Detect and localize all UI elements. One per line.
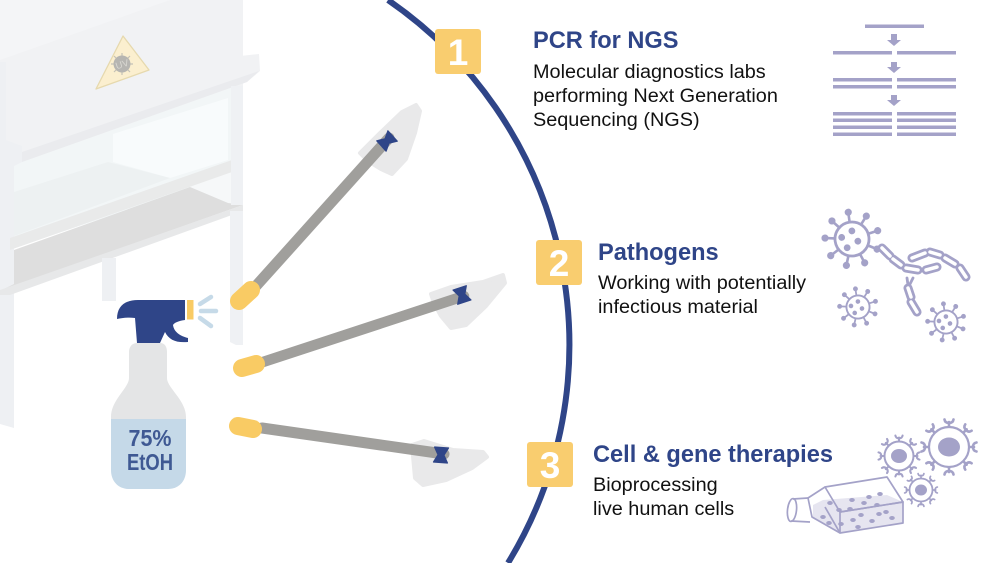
- swab 1: [239, 105, 420, 301]
- wipe 1: [360, 105, 420, 174]
- biosafety cabinet: [0, 0, 260, 428]
- wipe 3: [412, 441, 487, 485]
- cabinet lip: [6, 54, 260, 162]
- bacteria chains: [882, 248, 966, 312]
- swab 1 handle tip: [239, 290, 251, 301]
- bottle label: 75%: [128, 425, 172, 451]
- badge 2: 2: [549, 243, 569, 284]
- spray lines: [200, 297, 216, 326]
- blue arc: [388, 0, 569, 563]
- cabinet left column: [0, 62, 22, 428]
- bottle liquid: [111, 419, 186, 489]
- text: PCR description: Sequencing (NGS): [533, 109, 700, 131]
- cabinet shelf: [0, 187, 243, 291]
- bottle trigger head: [117, 300, 188, 343]
- bottle label: EtOH: [127, 449, 173, 475]
- cell medium: [878, 436, 920, 476]
- UV warning triangle: UV: [114, 57, 131, 72]
- icon: pathogens: [817, 204, 970, 345]
- swab 2: [242, 275, 505, 368]
- badge 1: 1: [448, 32, 468, 73]
- icon: cells and flask: [786, 420, 976, 533]
- icon: PCR amplification: [833, 24, 956, 136]
- cell large: [922, 420, 976, 474]
- cabinet glass: [14, 82, 232, 248]
- spray bottle: [111, 297, 216, 489]
- virus small right: [922, 298, 970, 345]
- UV warning triangle: [96, 36, 149, 89]
- text: pathogens description: infectious material: [598, 296, 758, 318]
- text: cell therapies description: Bioprocessing: [593, 474, 718, 496]
- heading: PCR for NGS: PCR for NGS: [533, 28, 679, 54]
- virus large: [817, 204, 887, 273]
- heading: Cell and gene therapies: Cell & gene therapies: [593, 442, 833, 468]
- bottle nozzle: [187, 300, 194, 320]
- bottle label: [127, 425, 173, 475]
- cell small: [905, 474, 937, 506]
- text: pathogens description: Working with potentially: [598, 272, 806, 294]
- culture flask: [786, 477, 903, 533]
- cabinet sash bar: [10, 160, 232, 250]
- swab 2 handle tip: [242, 364, 256, 368]
- badge 1: [435, 29, 481, 74]
- wipe 2: [431, 275, 505, 328]
- text: PCR description: Molecular diagnostics labs: [533, 61, 766, 83]
- virus small left: [834, 283, 882, 330]
- cabinet body: [0, 0, 243, 170]
- badge 3: 3: [540, 445, 560, 486]
- badge 2: [536, 240, 582, 285]
- heading: Pathogens: Pathogens: [598, 240, 719, 266]
- swab 3: [238, 426, 487, 485]
- cabinet legs: [102, 258, 116, 301]
- text: cell therapies description: live human cells: [593, 498, 734, 520]
- bottle body: [111, 343, 186, 430]
- text: PCR description: performing Next Generation: [533, 85, 778, 107]
- badge 3: [527, 442, 573, 487]
- swab 3 handle tip: [238, 426, 253, 429]
